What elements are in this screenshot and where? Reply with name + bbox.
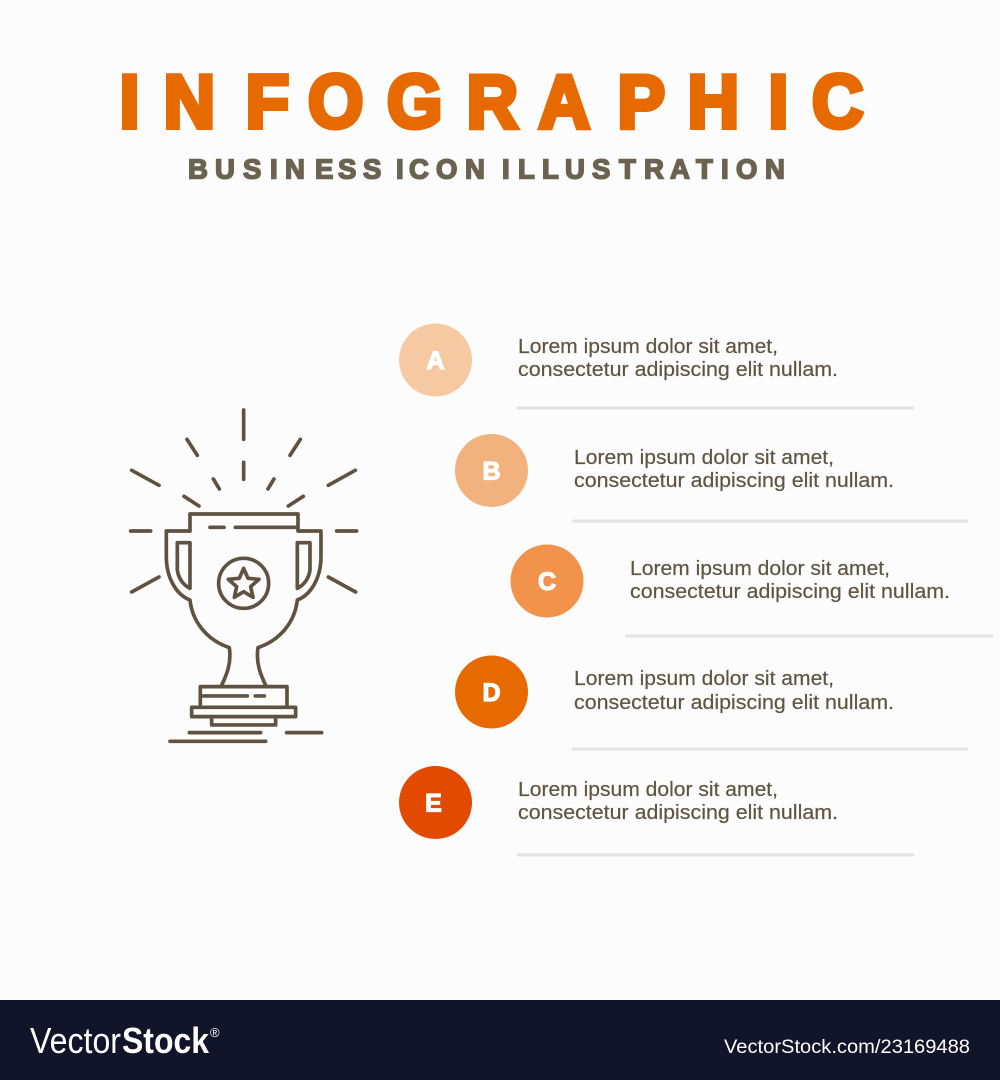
text C: consectetur adipiscing elit nullam. (630, 581, 950, 603)
text B: Lorem ipsum dolor sit amet, (574, 447, 834, 469)
text D: consectetur adipiscing elit nullam. (574, 692, 894, 714)
title: INFOGRAPHIC (120, 61, 863, 144)
badge D: D (482, 679, 501, 707)
badge A: A (426, 347, 445, 375)
badge E (399, 766, 472, 839)
icon: star badge (219, 558, 269, 608)
badge E: E (425, 790, 442, 818)
badge B (455, 434, 528, 507)
text C: Lorem ipsum dolor sit amet, (630, 558, 890, 580)
icon: cup (166, 514, 321, 687)
text A: Lorem ipsum dolor sit amet, (518, 336, 778, 358)
item C (510, 544, 993, 636)
badge C: C (538, 568, 556, 596)
icon: rays (131, 410, 357, 592)
badge B: B (482, 458, 501, 486)
subtitle: BUSINESSICONILLUSTRATION (188, 153, 785, 184)
item A (399, 324, 914, 408)
text E: consectetur adipiscing elit nullam. (518, 802, 838, 824)
item E (399, 766, 914, 855)
icon: trophy base (170, 687, 322, 741)
text D: Lorem ipsum dolor sit amet, (574, 668, 834, 690)
footer bar (0, 1000, 1000, 1080)
item D (455, 656, 968, 749)
text A: consectetur adipiscing elit nullam. (518, 359, 838, 381)
item B (455, 434, 968, 521)
badge C (510, 544, 584, 618)
footer logo: ® (210, 1025, 220, 1040)
badge D (455, 656, 528, 728)
icon: trophy with rays (131, 410, 357, 741)
text B: consectetur adipiscing elit nullam. (574, 470, 894, 492)
footer logo: Stock (122, 1020, 210, 1061)
footer image id: VectorStock.com/23169488 (724, 1037, 970, 1058)
footer logo: Vector (30, 1020, 121, 1061)
text E: Lorem ipsum dolor sit amet, (518, 779, 778, 801)
badge A (399, 324, 472, 396)
